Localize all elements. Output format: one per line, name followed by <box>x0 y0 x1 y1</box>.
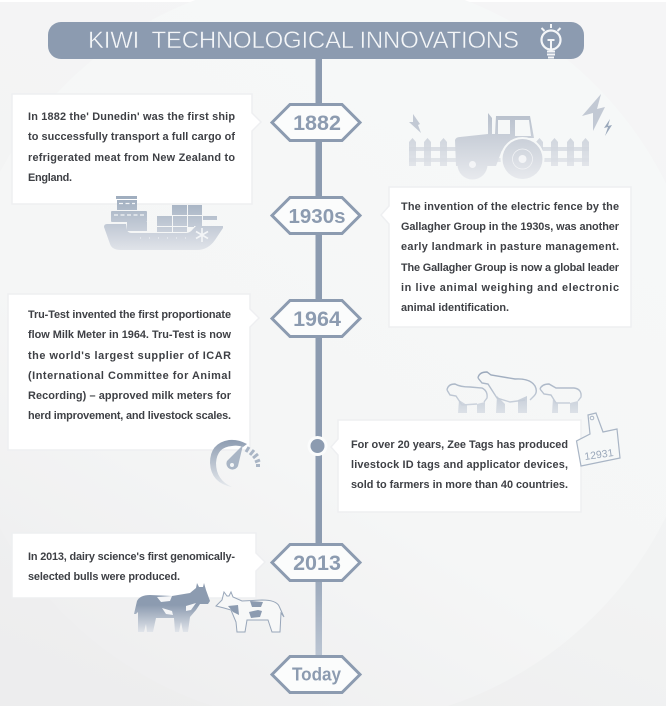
icon: dark cow <box>134 583 210 632</box>
text: 1930s: animal identification. <box>401 302 509 314</box>
title: KIWI TECHNOLOGICAL INNOVATIONS <box>88 27 519 54</box>
text: 1964: the world's largest supplier of ICAR <box>28 350 231 362</box>
text: 1882: England. <box>28 172 72 184</box>
text: 1930s: in live animal weighing and electronic <box>401 282 619 294</box>
text: 1964: Recording) – approved milk meters for <box>28 390 232 402</box>
year marker: Today <box>272 656 360 692</box>
text: 1964: herd improvement, and livestock scales. <box>28 410 231 422</box>
year marker: 1882: 1882 <box>293 111 341 135</box>
year marker: 1930s: 1930s <box>288 205 346 228</box>
year marker: 1882 <box>272 104 360 140</box>
panel: 2013 card <box>12 533 265 598</box>
icon: sheep <box>447 372 581 413</box>
timeline spine <box>316 55 322 665</box>
text: 1882: refrigerated meat from New Zealand to <box>28 152 235 164</box>
icon: ear tag: 12931 <box>584 447 614 463</box>
text: 1882 <box>28 111 235 184</box>
text: Zee Tags <box>351 439 568 491</box>
icon: cargo ship <box>104 196 223 250</box>
text: 1882: to successfully transport a full cargo of <box>28 131 235 143</box>
title banner <box>48 22 584 59</box>
text: 1964: flow Milk Meter in 1964. Tru-Test is now <box>28 329 232 341</box>
icon: light cow <box>216 592 284 632</box>
year marker: 1964: 1964 <box>293 307 341 331</box>
text: 1930s: The Gallagher Group is now a global leader <box>401 262 620 274</box>
text: 1964 <box>28 309 232 422</box>
text: 2013: In 2013, dairy science's first genomically- <box>28 551 235 563</box>
year marker: Today: Today <box>292 664 341 684</box>
text: Zee Tags: sold to farmers in more than 40 countries. <box>351 479 568 491</box>
icon: ear tag <box>576 413 620 466</box>
text: 1930s <box>401 201 620 314</box>
icon: lightning bolts <box>409 94 612 136</box>
year marker: 1930s <box>272 198 360 234</box>
text: Zee Tags: For over 20 years, Zee Tags has produced <box>351 439 568 451</box>
text: 2013 <box>28 551 235 583</box>
text: 1930s: early landmark in pasture management. <box>401 241 619 253</box>
panel: 1882 card <box>12 94 261 204</box>
year marker: 2013: 2013 <box>293 551 341 575</box>
text: 1882: In 1882 the' Dunedin' was the first ship <box>28 111 235 123</box>
text: 1964: Tru-Test invented the first proportionate <box>28 309 231 321</box>
text: 1930s: Gallagher Group in the 1930s, was another <box>401 221 620 233</box>
text: 2013: selected bulls were produced. <box>28 571 180 583</box>
year marker: 1964 <box>272 300 360 336</box>
text: Zee Tags: livestock ID tags and applicator devices, <box>351 459 568 471</box>
timeline dot <box>308 436 328 456</box>
panel: 1964 card <box>8 294 259 450</box>
text: 1964: (International Committee for Animal <box>28 370 231 382</box>
panel: 1930s card <box>381 187 631 327</box>
icon: light bulb <box>542 24 560 58</box>
icon: tractor and electric fence <box>409 113 589 181</box>
panel: Zee Tags card <box>331 420 581 512</box>
text: 1930s: The invention of the electric fence by the <box>401 201 619 213</box>
year marker: 2013 <box>272 544 360 580</box>
icon: milk meter gauge <box>210 440 260 487</box>
